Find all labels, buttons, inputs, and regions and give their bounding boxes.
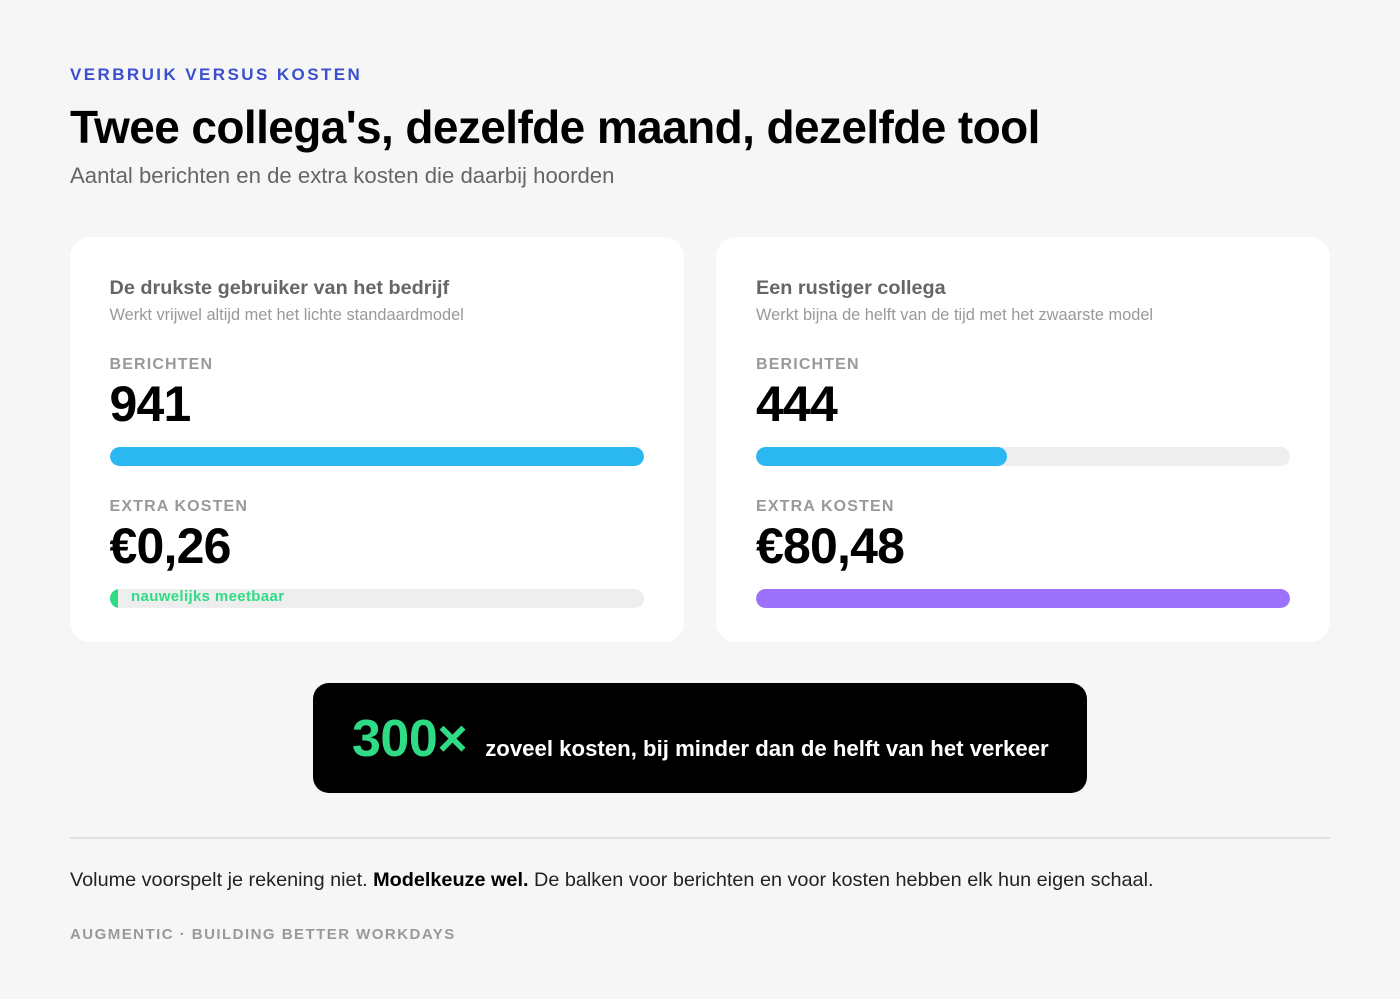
conclusion text: Volume voorspelt je rekening niet. Modelkeuze wel. De balken voor berichten en voor kosten hebben elk hun eigen schaal. — [70, 869, 1154, 891]
panel: rustiger collega — [716, 237, 1330, 642]
label: berichten: BERICHTEN — [756, 356, 860, 372]
bar: berichten 444 — [756, 447, 1290, 466]
card heading: De drukste gebruiker van het bedrijf — [110, 277, 449, 299]
label: extra kosten: EXTRA KOSTEN — [110, 498, 248, 514]
label: extra kosten: EXTRA KOSTEN — [756, 498, 895, 514]
callout text: zoveel kosten, bij minder dan de helft van het verkeer — [485, 736, 1049, 761]
eyebrow: VERBRUIK VERSUS KOSTEN — [70, 65, 362, 84]
bar: kosten 0,26 — [110, 589, 644, 608]
bar note: nauwelijks meetbaar — [131, 588, 284, 605]
panel: drukste gebruiker — [70, 237, 684, 642]
number: 941: 941 — [110, 376, 191, 432]
label: berichten: BERICHTEN — [110, 356, 213, 372]
number: kosten 80,48: €80,48 — [756, 518, 904, 574]
number: kosten 0,26: €0,26 — [110, 518, 231, 574]
card heading: Een rustiger collega — [756, 277, 946, 299]
callout figure: 300× — [352, 710, 467, 768]
subtitle: Aantal berichten en de extra kosten die daarbij hoorden — [70, 163, 614, 188]
card description: Werkt bijna de helft van de tijd met het zwaarste model — [756, 306, 1153, 324]
title: Twee collega's, dezelfde maand, dezelfde tool — [70, 101, 1040, 153]
card description: Werkt vrijwel altijd met het lichte standaardmodel — [110, 306, 464, 324]
bar: berichten 941 — [110, 447, 644, 466]
callout — [312, 683, 1087, 792]
bar: kosten 80,48 — [756, 589, 1290, 608]
number: 444: 444 — [756, 376, 837, 432]
footer: AUGMENTIC · BUILDING BETTER WORKDAYS — [70, 926, 456, 943]
